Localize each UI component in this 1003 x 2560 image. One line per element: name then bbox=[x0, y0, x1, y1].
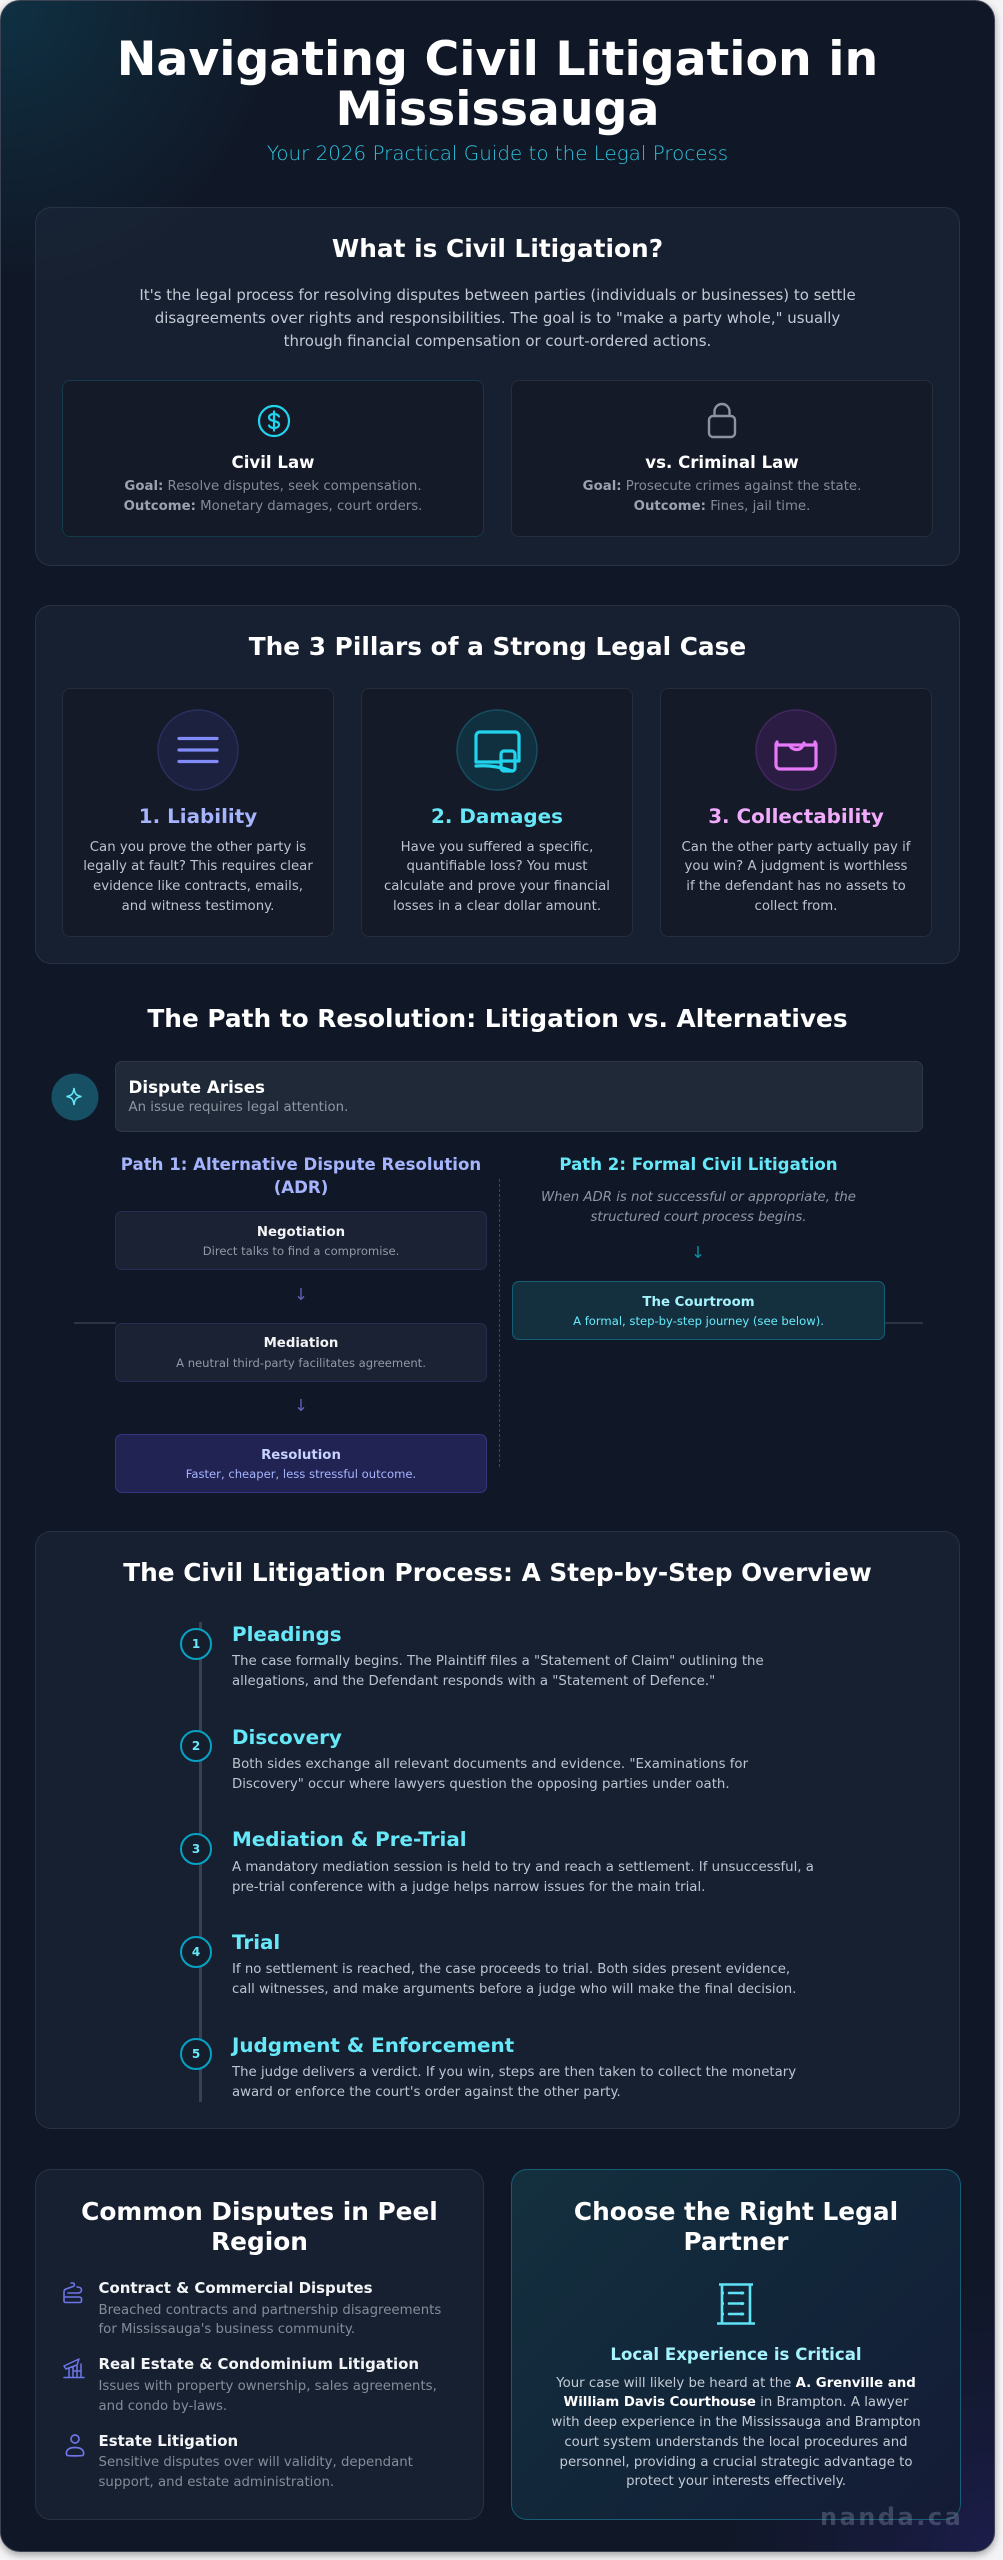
path 1 heading: (ADR) bbox=[274, 1178, 328, 1196]
step title: Discovery bbox=[232, 1726, 342, 1749]
card text: Outcome: Fines, jail time. bbox=[634, 499, 810, 514]
step number bbox=[180, 2038, 212, 2070]
intro paragraph bbox=[139, 286, 856, 350]
step title: Mediation & Pre-Trial bbox=[232, 1828, 467, 1851]
dispute text: support, and estate administration. bbox=[98, 2475, 334, 2490]
step text: pre-trial conference with a judge helps narrow issues for the main trial. bbox=[232, 1880, 705, 1895]
icon: dollar bbox=[258, 404, 290, 438]
pillar text: and witness testimony. bbox=[122, 899, 274, 914]
dispute text: Issues with property ownership, sales agreements, bbox=[98, 2379, 437, 2394]
card: criminal law bbox=[511, 380, 933, 537]
step text bbox=[232, 2065, 796, 2100]
step number bbox=[180, 1730, 212, 1762]
column: path 1 ADR bbox=[115, 1154, 487, 1493]
dispute text: and condo by-laws. bbox=[98, 2399, 227, 2414]
pillar text bbox=[384, 840, 610, 914]
pillar text: Can the other party actually pay if bbox=[682, 840, 910, 854]
path 2 text bbox=[541, 1190, 856, 1225]
path 2 text: structured court process begins. bbox=[590, 1210, 807, 1225]
step title: Judgment & Enforcement bbox=[232, 2034, 514, 2057]
pillar text: collect from. bbox=[755, 899, 837, 914]
pillar text bbox=[83, 840, 313, 914]
dispute title: Real Estate & Condominium Litigation bbox=[98, 2355, 419, 2373]
panel: common disputes bbox=[35, 2169, 484, 2520]
step number: 2 bbox=[192, 1739, 200, 1753]
icon: person bbox=[66, 2434, 84, 2457]
dispute text: Breached contracts and partnership disagreements bbox=[98, 2303, 441, 2318]
arrow: ↓ bbox=[691, 1243, 705, 1262]
box title: The Courtroom bbox=[642, 1294, 755, 1310]
dispute text: for Mississauga's business community. bbox=[98, 2322, 355, 2337]
dispute: estate bbox=[66, 2432, 413, 2490]
heading: The 3 Pillars of a Strong Legal Case bbox=[249, 632, 746, 661]
step number bbox=[180, 1833, 212, 1865]
box text: An issue requires legal attention. bbox=[128, 1100, 348, 1115]
step number: 3 bbox=[192, 1842, 200, 1856]
panel: what is civil litigation bbox=[35, 207, 960, 566]
step title: Pleadings bbox=[232, 1623, 342, 1646]
step text bbox=[232, 1654, 764, 1689]
panel: legal partner bbox=[511, 2169, 961, 2520]
card: civil law bbox=[62, 380, 484, 537]
panel: three pillars bbox=[35, 605, 960, 964]
icon: wallet bbox=[755, 709, 837, 791]
title bbox=[117, 32, 878, 137]
step 5 bbox=[180, 2034, 796, 2100]
pillar: damages bbox=[361, 688, 633, 937]
icon: lines bbox=[157, 709, 239, 791]
icon: contract bbox=[63, 2282, 82, 2304]
step text: Both sides exchange all relevant documents and evidence. "Examinations for bbox=[232, 1757, 748, 1772]
heading: Region bbox=[211, 2226, 308, 2256]
pillar text: Can you prove the other party is bbox=[90, 840, 306, 854]
pillar title: 1. Liability bbox=[139, 805, 257, 828]
text: protect your interests effectively. bbox=[626, 2474, 846, 2489]
dispute text bbox=[98, 2455, 413, 2490]
step text bbox=[232, 1757, 748, 1792]
step 4 bbox=[180, 1931, 796, 1997]
step text: allegations, and the Defendant responds with a "Statement of Defence." bbox=[232, 1674, 715, 1689]
box: resolution bbox=[115, 1434, 487, 1493]
title: Navigating Civil Litigation in bbox=[117, 32, 878, 87]
step title: Trial bbox=[232, 1931, 280, 1954]
pillar text: you win? A judgment is worthless bbox=[685, 859, 907, 874]
pillar title: 2. Damages bbox=[431, 805, 563, 828]
box: dispute arises bbox=[115, 1061, 923, 1132]
pillar: liability bbox=[62, 688, 334, 937]
path 2 text: When ADR is not successful or appropriate, the bbox=[541, 1190, 856, 1205]
pillar title: 3. Collectability bbox=[708, 805, 884, 828]
intro paragraph: through financial compensation or court-ordered actions. bbox=[284, 332, 711, 350]
dispute text bbox=[98, 2379, 437, 2414]
dispute: real estate bbox=[63, 2355, 437, 2414]
card text: Goal: Resolve disputes, seek compensation. bbox=[124, 479, 422, 494]
step text: award or enforce the court's order against the other party. bbox=[232, 2085, 621, 2100]
pillar text: Have you suffered a specific, bbox=[401, 840, 593, 854]
box text: A formal, step-by-step journey (see below). bbox=[573, 1314, 824, 1328]
dispute text bbox=[98, 2303, 441, 2337]
icon: lock bbox=[708, 402, 736, 438]
dispute: contract bbox=[63, 2279, 441, 2337]
heading: The Civil Litigation Process: A Step-by-Step Overview bbox=[123, 1558, 872, 1587]
text: court system understands the local procedures and bbox=[564, 2435, 908, 2450]
heading: Partner bbox=[683, 2226, 789, 2256]
title: Mississauga bbox=[335, 82, 660, 137]
pillar text: if the defendant has no assets to bbox=[686, 879, 906, 894]
dispute title: Contract & Commercial Disputes bbox=[98, 2279, 372, 2297]
watermark: nanda.ca bbox=[820, 2503, 963, 2531]
box text: Direct talks to find a compromise. bbox=[203, 1244, 399, 1258]
pillar text: quantifiable loss? You must bbox=[406, 859, 588, 874]
icon: building bbox=[63, 2358, 85, 2378]
intro paragraph: disagreements over rights and responsibilities. The goal is to "make a party whole," usually bbox=[155, 309, 840, 327]
text: Your case will likely be heard at the A. Grenville and bbox=[556, 2376, 916, 2390]
text: William Davis Courthouse in Brampton. A lawyer bbox=[564, 2395, 908, 2410]
card title: Civil Law bbox=[232, 452, 314, 472]
card text bbox=[583, 479, 861, 514]
step number: 4 bbox=[192, 1945, 200, 1959]
arrow: ↓ bbox=[294, 1285, 308, 1304]
pillar text: evidence like contracts, emails, bbox=[93, 879, 303, 894]
box text: A neutral third-party facilitates agreement. bbox=[176, 1356, 426, 1370]
step 1 bbox=[180, 1623, 764, 1689]
path 1 heading: Path 1: Alternative Dispute Resolution bbox=[121, 1154, 481, 1174]
step text: Discovery" occur where lawyers question the opposing parties under oath. bbox=[232, 1777, 730, 1792]
step text: The judge delivers a verdict. If you win, steps are then taken to collect the monetary bbox=[232, 2065, 796, 2080]
heading bbox=[81, 2196, 438, 2256]
arrow: ↓ bbox=[294, 1396, 308, 1415]
card title: vs. Criminal Law bbox=[645, 452, 799, 472]
card text bbox=[124, 479, 422, 514]
connector left bbox=[74, 1322, 116, 1324]
box: mediation bbox=[115, 1322, 487, 1382]
step number bbox=[180, 1628, 212, 1660]
pillar text bbox=[682, 840, 911, 914]
card text: Outcome: Monetary damages, court orders. bbox=[124, 499, 422, 514]
heading bbox=[574, 2196, 898, 2256]
divider bbox=[499, 1179, 500, 1467]
pillar text: losses in a clear dollar amount. bbox=[393, 899, 601, 914]
pillar: collectability bbox=[660, 688, 932, 937]
step text: If no settlement is reached, the case proceeds to trial. Both sides present evidence, bbox=[232, 1962, 790, 1977]
text: personnel, providing a crucial strategic advantage to bbox=[560, 2455, 912, 2470]
path 2 heading: Path 2: Formal Civil Litigation bbox=[559, 1154, 838, 1174]
timeline line bbox=[199, 1622, 202, 2102]
box: negotiation bbox=[115, 1211, 487, 1270]
step 3 bbox=[180, 1828, 814, 1895]
heading: Choose the Right Legal bbox=[574, 2196, 898, 2226]
text: with deep experience in the Mississauga and Brampton bbox=[551, 2415, 921, 2430]
pillar text: calculate and prove your financial bbox=[384, 879, 610, 894]
step text bbox=[232, 1962, 796, 1997]
heading: path to resolution: The Path to Resolution: Litigation vs. Alternatives bbox=[147, 1004, 848, 1033]
box title: Negotiation bbox=[257, 1224, 345, 1240]
step number bbox=[180, 1936, 212, 1968]
subtitle: Your 2026 Practical Guide to the Legal Process bbox=[267, 142, 728, 165]
step number: 5 bbox=[192, 2047, 200, 2061]
column: path 2 formal litigation bbox=[512, 1154, 885, 1340]
box: courtroom bbox=[512, 1281, 885, 1340]
heading: Common Disputes in Peel bbox=[81, 2196, 438, 2226]
step text: call witnesses, and make arguments before a judge who will make the final decision. bbox=[232, 1982, 796, 1997]
step text: A mandatory mediation session is held to try and reach a settlement. If unsuccessful, a bbox=[232, 1860, 814, 1875]
panel: process bbox=[35, 1531, 960, 2129]
box title: Dispute Arises bbox=[128, 1077, 265, 1097]
icon: dispute marker bbox=[52, 1074, 98, 1120]
box title: Resolution bbox=[261, 1448, 341, 1462]
step number: 1 bbox=[192, 1636, 200, 1650]
dispute text: Sensitive disputes over will validity, dependant bbox=[98, 2455, 413, 2470]
card text: Goal: Prosecute crimes against the state. bbox=[583, 479, 861, 494]
step text bbox=[232, 1860, 814, 1895]
step 2 bbox=[180, 1726, 748, 1792]
step text: The case formally begins. The Plaintiff files a "Statement of Claim" outlining the bbox=[232, 1654, 764, 1669]
intro paragraph: It's the legal process for resolving disputes between parties (individuals or businesses) to settle bbox=[139, 286, 856, 304]
box text: Faster, cheaper, less stressful outcome. bbox=[186, 1467, 416, 1481]
path 1 heading bbox=[121, 1154, 481, 1196]
dispute title: Estate Litigation bbox=[98, 2432, 238, 2450]
connector right bbox=[884, 1322, 923, 1324]
box title: Mediation bbox=[264, 1336, 338, 1351]
pillar text: legally at fault? This requires clear bbox=[83, 859, 313, 874]
heading: What is Civil Litigation? bbox=[332, 234, 663, 263]
icon: screen bbox=[456, 709, 538, 791]
icon: document bbox=[717, 2283, 755, 2325]
text bbox=[551, 2376, 921, 2489]
subheading: Local Experience is Critical bbox=[610, 2345, 862, 2364]
